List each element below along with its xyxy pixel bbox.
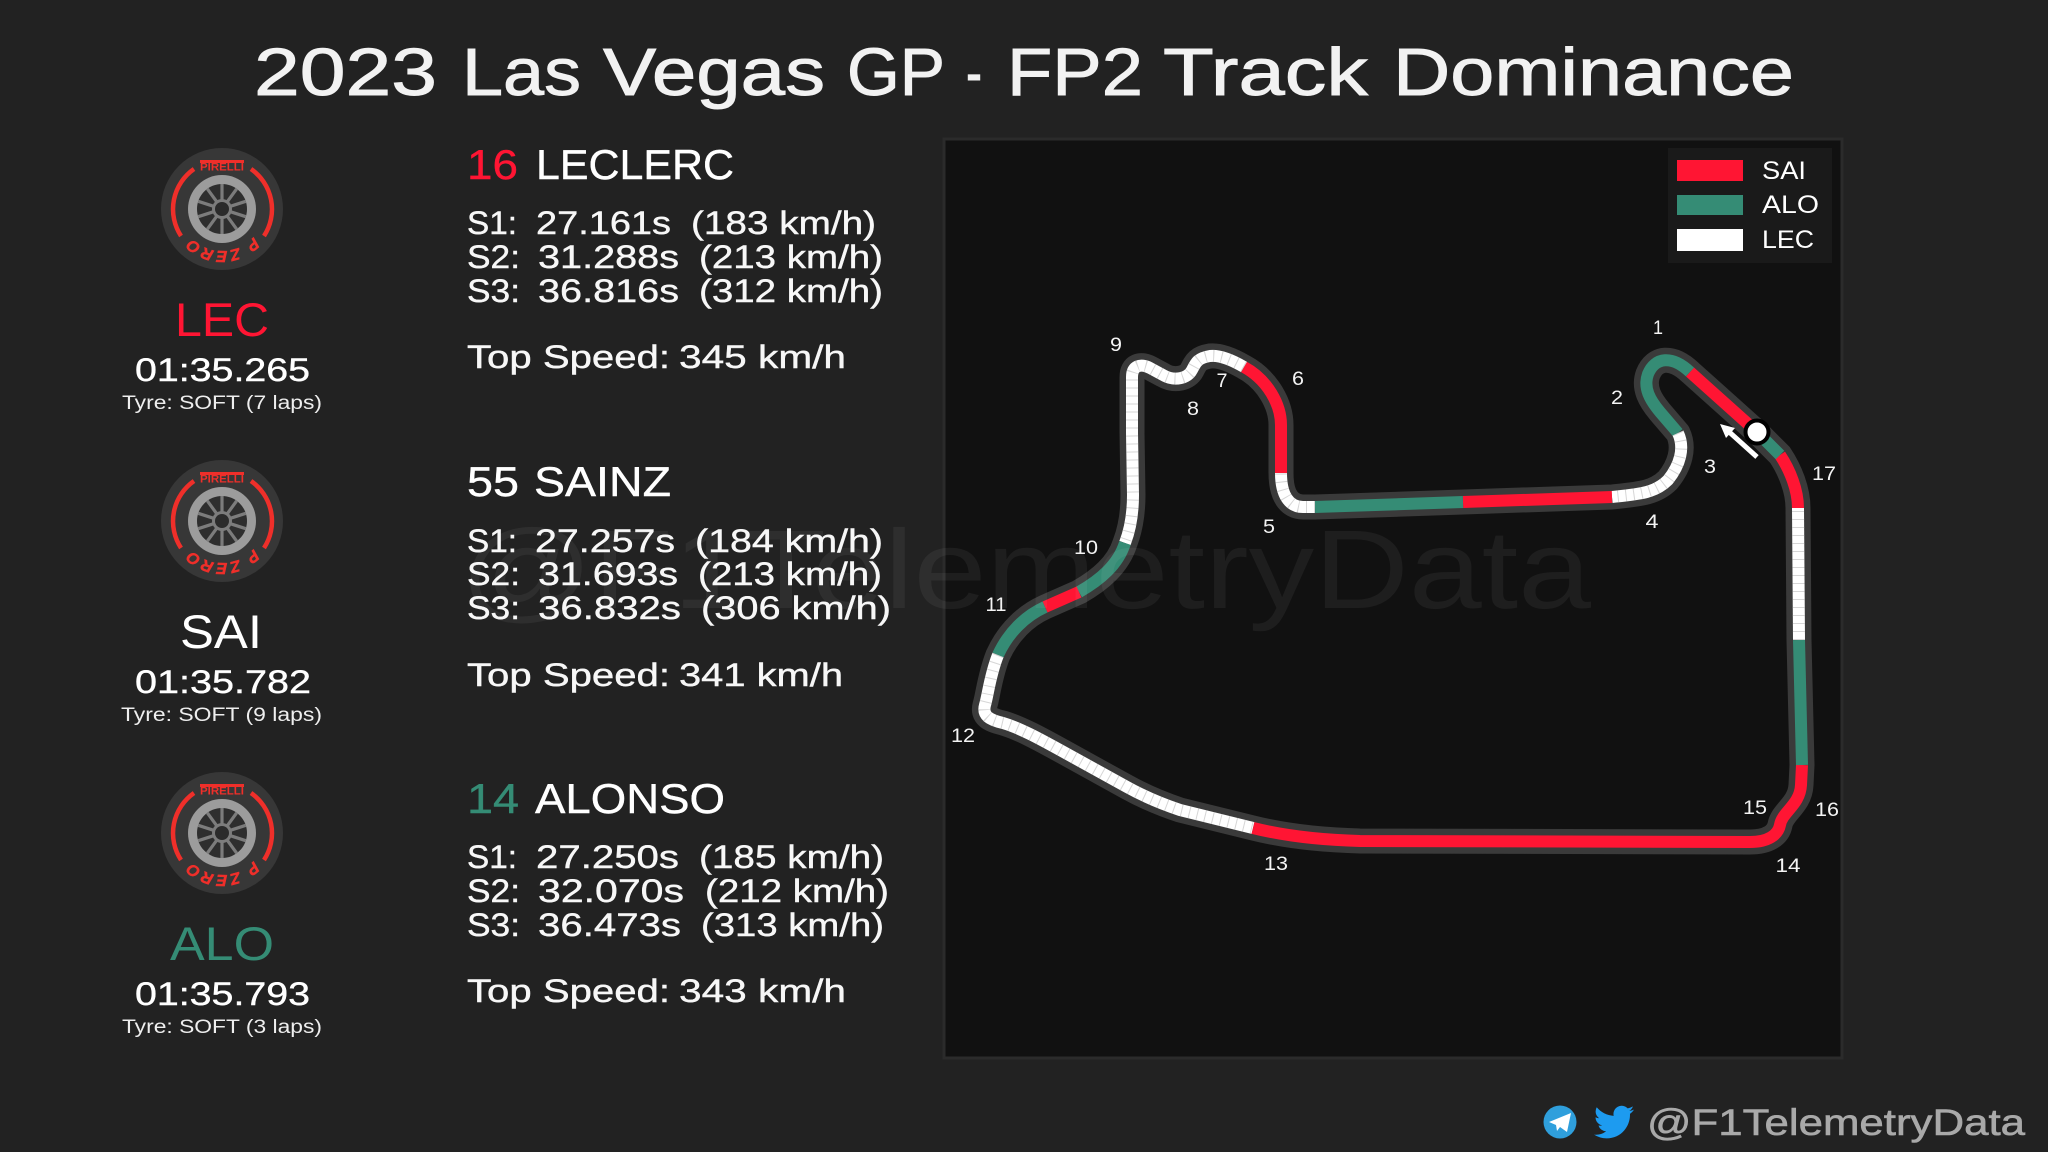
sector times: 32.070s	[538, 873, 684, 909]
lap time: 01:35.782	[135, 664, 311, 700]
sector times: S1:	[467, 523, 517, 559]
title	[254, 35, 1794, 110]
corner numbers: 14	[1776, 856, 1801, 877]
sector times: S2:	[467, 556, 520, 592]
track outline	[984, 356, 1802, 842]
sector times: 27.257s	[535, 523, 675, 559]
sector times: S1:	[467, 205, 517, 241]
legend: LEC	[1762, 226, 1814, 254]
sector times: (184 km/h)	[695, 523, 883, 559]
heading: SAINZ	[534, 458, 671, 505]
title: Las	[462, 35, 581, 110]
heading: 55	[467, 458, 519, 505]
icon: soft tyre ALO: P ZERO	[186, 860, 260, 886]
corner numbers: 16	[1815, 800, 1839, 821]
sector times	[467, 205, 883, 309]
panel: track map	[944, 139, 1842, 1058]
sector times: 36.832s	[538, 590, 681, 626]
panel: driver ALO summary	[122, 772, 322, 1038]
sector times: 31.288s	[538, 239, 679, 275]
corner numbers: 2	[1611, 388, 1623, 409]
heading	[467, 458, 671, 505]
top speed: 341 km/h	[679, 657, 843, 693]
sector times: 36.473s	[538, 907, 681, 943]
title: GP	[847, 35, 945, 110]
top speed: 343 km/h	[679, 973, 846, 1009]
icon: soft tyre SAI: P ZERO	[186, 548, 260, 574]
sector times: S3:	[467, 907, 520, 943]
track dominance segments	[984, 356, 1802, 842]
corner numbers: 4	[1646, 512, 1659, 533]
icon: soft tyre SAI: PIRELLI	[200, 474, 244, 486]
watermark: @F1TelemetryData	[460, 507, 1592, 632]
icon: soft tyre ALO	[161, 772, 283, 894]
corner numbers: 10	[1074, 538, 1098, 559]
corner numbers: 5	[1263, 517, 1275, 538]
corner numbers: 11	[986, 595, 1006, 616]
panel: driver LEC summary	[122, 148, 322, 414]
heading	[467, 775, 725, 822]
top speed	[467, 657, 843, 693]
sector times: (313 km/h)	[701, 907, 884, 943]
sector times: (183 km/h)	[691, 205, 876, 241]
top speed: 345 km/h	[679, 339, 846, 375]
sector times	[467, 839, 889, 943]
title: 2023	[254, 35, 437, 110]
driver code: SAI	[180, 605, 262, 658]
title: Dominance	[1393, 35, 1794, 110]
sector times: (312 km/h)	[699, 273, 883, 309]
top speed	[467, 339, 846, 375]
sector times: S3:	[467, 590, 520, 626]
corner numbers: 17	[1812, 464, 1836, 485]
heading: 16	[467, 141, 518, 188]
sector times: S2:	[467, 239, 520, 275]
panel: driver SAI summary	[121, 460, 322, 726]
corner numbers: 1	[1653, 318, 1663, 339]
sector times: (213 km/h)	[698, 556, 882, 592]
corner numbers: 15	[1743, 798, 1767, 819]
sector times: (185 km/h)	[699, 839, 884, 875]
legend	[1668, 148, 1832, 263]
corner numbers: 7	[1216, 371, 1228, 392]
tyre info: Tyre: SOFT (7 laps)	[122, 393, 322, 414]
tyre info: Tyre: SOFT (3 laps)	[122, 1017, 322, 1038]
sector times: S3:	[467, 273, 520, 309]
icon: twitter	[1594, 1106, 1634, 1138]
corner numbers: 6	[1292, 369, 1304, 390]
sector times: 27.161s	[536, 205, 671, 241]
top speed: Top Speed:	[467, 973, 670, 1009]
corner numbers: 8	[1187, 399, 1199, 420]
sector times	[467, 523, 891, 626]
driver code: LEC	[175, 293, 269, 346]
heading: ALONSO	[535, 775, 725, 822]
panel: LECLERC sector details	[467, 141, 883, 375]
icon: soft tyre LEC	[161, 148, 283, 270]
corner numbers	[951, 318, 1839, 877]
driver code: ALO	[170, 917, 274, 970]
sector times: (306 km/h)	[701, 590, 891, 626]
legend: ALO	[1762, 191, 1819, 219]
sector times: 36.816s	[538, 273, 679, 309]
title: -	[966, 35, 982, 110]
corner numbers: 9	[1110, 335, 1122, 356]
start marker	[1746, 420, 1768, 444]
lap time: 01:35.793	[135, 976, 310, 1012]
icon: telegram	[1544, 1106, 1576, 1138]
title: Track	[1163, 35, 1369, 110]
corner numbers: 3	[1704, 457, 1716, 478]
icon: soft tyre ALO: PIRELLI	[200, 786, 244, 798]
corner numbers: 12	[951, 726, 975, 747]
footer: social handle	[1544, 1102, 2025, 1143]
top speed: Top Speed:	[467, 339, 670, 375]
handle text: @F1TelemetryData	[1647, 1102, 2025, 1143]
sector times: (213 km/h)	[699, 239, 883, 275]
legend: SAI	[1762, 157, 1806, 185]
sector times: 31.693s	[538, 556, 678, 592]
icon: soft tyre SAI	[161, 460, 283, 582]
arrow: direction of travel	[1720, 424, 1757, 457]
corner numbers: 13	[1264, 854, 1288, 875]
top speed: Top Speed:	[467, 657, 670, 693]
heading: 14	[467, 775, 519, 822]
title: FP2	[1007, 35, 1143, 110]
top speed	[467, 973, 846, 1009]
icon: soft tyre LEC: P ZERO	[186, 236, 260, 262]
panel: SAINZ sector details	[467, 458, 891, 693]
icon: soft tyre LEC: PIRELLI	[200, 162, 244, 174]
sector times: (212 km/h)	[705, 873, 889, 909]
heading: LECLERC	[536, 141, 734, 188]
sector times: S1:	[467, 839, 517, 875]
title: Vegas	[603, 35, 825, 110]
panel: ALONSO sector details	[467, 775, 889, 1009]
sector times: 27.250s	[536, 839, 679, 875]
tyre info: Tyre: SOFT (9 laps)	[121, 705, 322, 726]
lap time: 01:35.265	[135, 352, 310, 388]
sector times: S2:	[467, 873, 520, 909]
